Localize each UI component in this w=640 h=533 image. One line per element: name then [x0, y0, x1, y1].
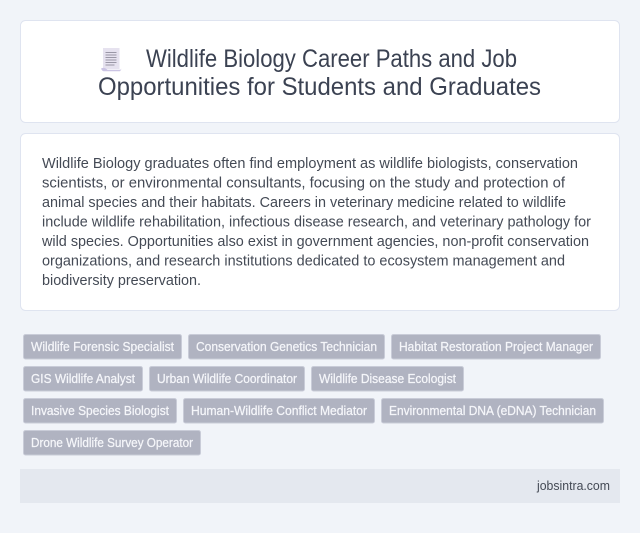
tag	[24, 430, 200, 455]
footer source text: jobsintra.com	[536, 479, 610, 493]
tag: Wildlife Disease Ecologist	[319, 372, 456, 386]
tag: Habitat Restoration Project Manager	[399, 340, 593, 354]
tag	[150, 366, 304, 391]
tag: Environmental DNA (eDNA) Technician	[389, 404, 596, 418]
tag: Urban Wildlife Coordinator	[157, 372, 297, 386]
description text: Wildlife Biology graduates often find employment as wildlife biologists, conservation	[42, 156, 578, 172]
tag	[188, 334, 384, 359]
footer bar	[20, 469, 620, 503]
title: Opportunities for Students and Graduates	[98, 73, 541, 101]
tag	[24, 398, 176, 423]
tag	[382, 398, 604, 423]
tag: Wildlife Forensic Specialist	[31, 340, 174, 354]
tag: Drone Wildlife Survey Operator	[31, 436, 193, 450]
description text: organizations, and research institutions dedicated to ecosystem management and	[42, 254, 565, 270]
tag: GIS Wildlife Analyst	[31, 372, 135, 386]
description text: scientists, or environmental consultants, focusing on the study and protection of	[42, 176, 566, 192]
title	[98, 45, 541, 101]
tag	[312, 366, 464, 391]
icon: document scroll	[101, 48, 122, 71]
tag: Human-Wildlife Conflict Mediator	[191, 404, 367, 418]
tag	[392, 334, 600, 359]
description text: animal species and their habitats. Careers in veterinary medicine related to wildlife	[42, 195, 566, 211]
tag: Conservation Genetics Technician	[196, 340, 377, 354]
panel: header card	[20, 20, 620, 122]
description text: wild species. Opportunities also exist in government agencies, non-profit conservation	[41, 234, 589, 250]
tag: Invasive Species Biologist	[31, 404, 169, 418]
description text: biodiversity preservation.	[42, 273, 201, 289]
title: Wildlife Biology Career Paths and Job	[146, 45, 517, 73]
tag	[184, 398, 374, 423]
panel: description card	[20, 134, 620, 310]
tag list	[24, 334, 604, 455]
tag	[24, 334, 182, 359]
description text	[41, 156, 591, 289]
description text: include wildlife rehabilitation, infectious disease research, and veterinary pathology for	[42, 214, 591, 230]
tag	[24, 366, 142, 391]
